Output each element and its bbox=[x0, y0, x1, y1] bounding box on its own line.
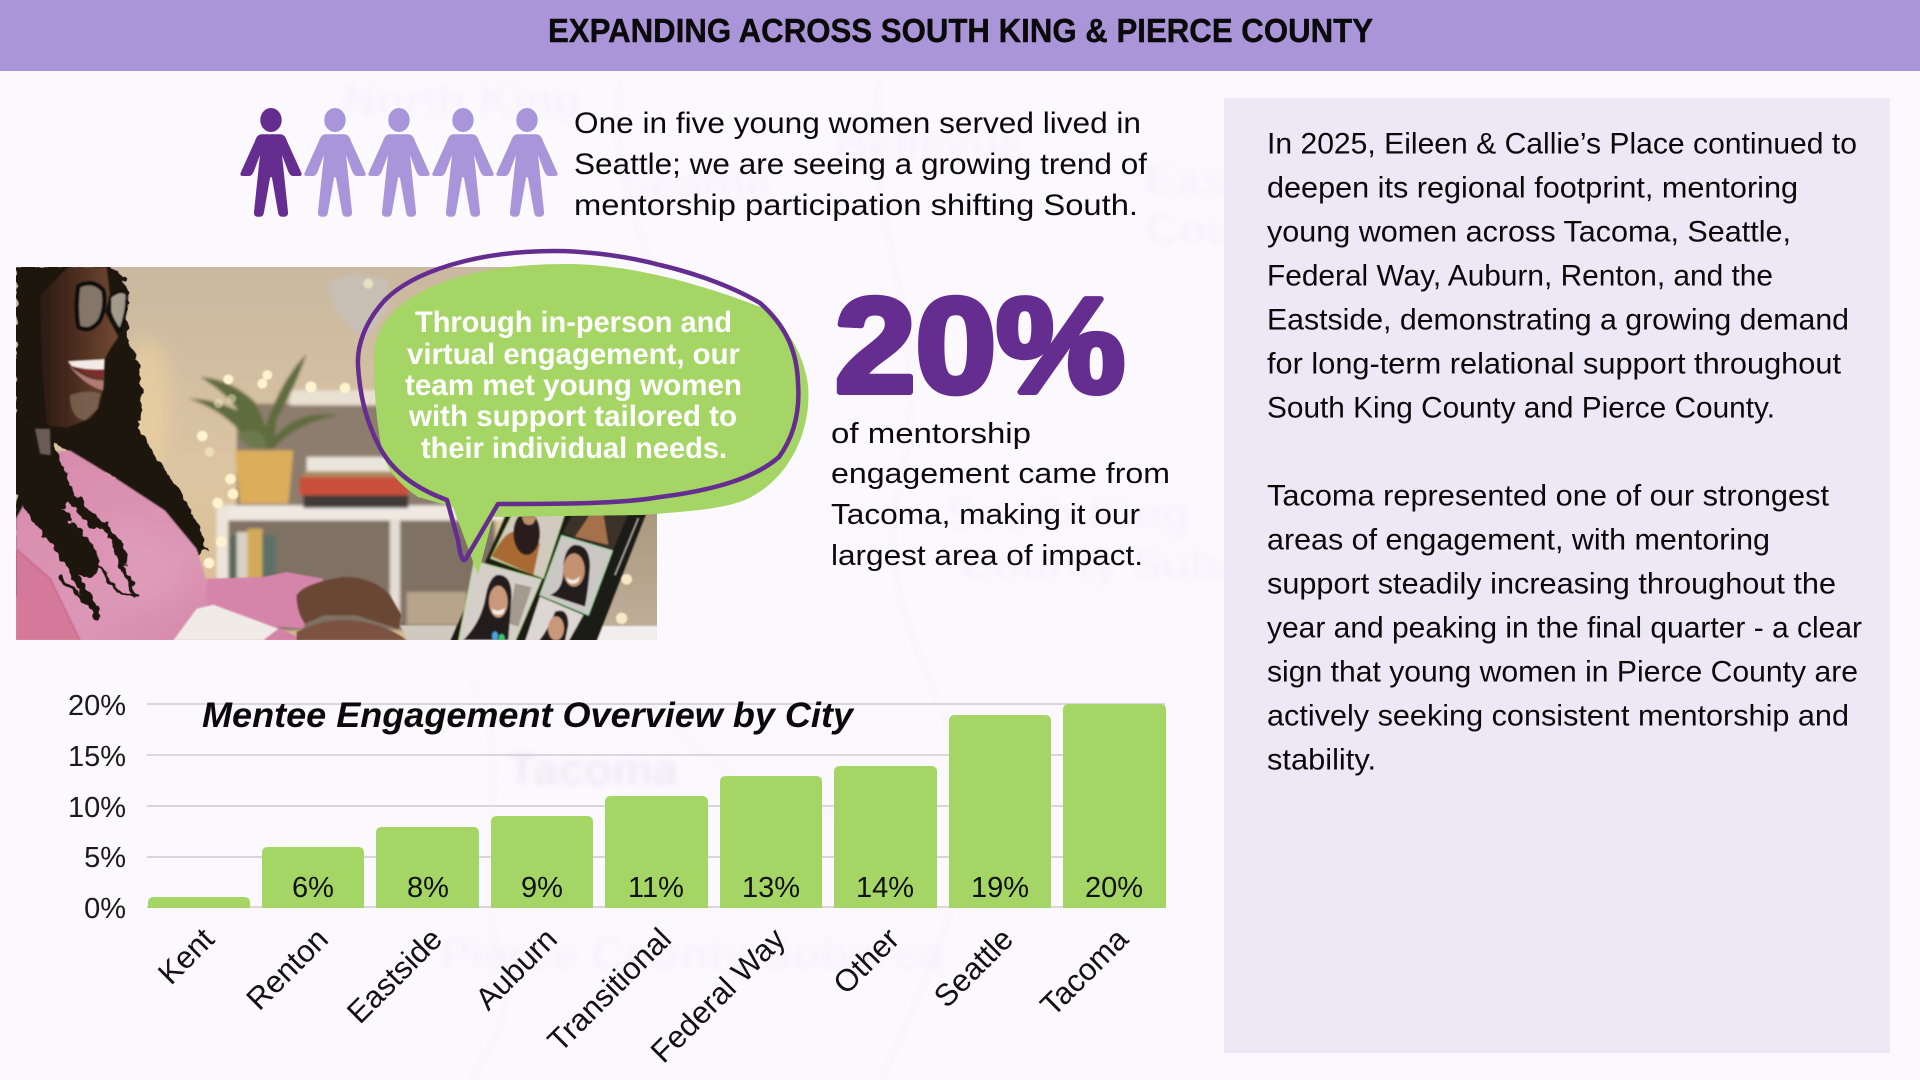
icon: highlighted person bbox=[240, 108, 302, 217]
category labels: Kent bbox=[151, 921, 221, 991]
icon: person 3 bbox=[368, 108, 430, 217]
background map watermark: Bellevue bbox=[835, 118, 1024, 170]
fairy lights bbox=[197, 279, 373, 568]
video tile 1 bbox=[491, 512, 565, 578]
y axis labels bbox=[68, 690, 126, 925]
screen app icons bbox=[492, 631, 505, 642]
chart title: Mentee Engagement Overview by City bbox=[202, 696, 855, 735]
y axis labels: 15% bbox=[68, 741, 126, 773]
video tile 5 bbox=[525, 597, 583, 642]
value labels: 19% bbox=[971, 872, 1029, 904]
right wall bbox=[602, 514, 657, 626]
white cuff bbox=[173, 605, 278, 640]
video tile 2 bbox=[563, 513, 628, 549]
video tile 4 bbox=[458, 561, 542, 642]
category labels: Auburn bbox=[469, 921, 564, 1017]
callout text bbox=[405, 306, 742, 465]
paragraph 2: sign that young women in Pierce County are bbox=[1267, 656, 1858, 688]
category labels: Transitional bbox=[541, 921, 678, 1058]
callout text: with support tailored to bbox=[408, 400, 737, 433]
background map watermark: North King bbox=[343, 74, 581, 126]
category labels: Tacoma bbox=[1033, 921, 1135, 1023]
callout text: team met young women bbox=[405, 369, 742, 402]
paragraph 1: South King County and Pierce County. bbox=[1267, 392, 1775, 424]
callout text: their individual needs. bbox=[421, 432, 727, 465]
purple outline bbox=[358, 251, 798, 560]
value labels: 8% bbox=[407, 872, 449, 904]
paragraph 2: stability. bbox=[1267, 744, 1376, 776]
text block: stat description: of mentorship bbox=[831, 418, 1031, 450]
icon: person 4 bbox=[432, 108, 494, 217]
bars bbox=[148, 704, 1166, 908]
text block: one in five: mentorship participation shifting South. bbox=[574, 189, 1138, 222]
wall lights bbox=[616, 574, 632, 624]
paragraph 2: year and peaking in the final quarter - a clear bbox=[1267, 612, 1862, 644]
icon row: one in five people bbox=[240, 108, 558, 217]
y axis labels: 5% bbox=[84, 842, 126, 874]
callout text: Through in-person and bbox=[415, 306, 732, 339]
hair bbox=[16, 267, 207, 595]
hands bbox=[297, 577, 402, 629]
photo wall and shelves bbox=[16, 267, 510, 640]
category labels: Eastside bbox=[340, 921, 449, 1030]
callout text: virtual engagement, our bbox=[407, 338, 740, 371]
value labels: 14% bbox=[856, 872, 914, 904]
background map watermark bbox=[343, 74, 1357, 1080]
text block: stat description: largest area of impact. bbox=[831, 540, 1143, 572]
glasses bbox=[77, 283, 127, 330]
text block: one in five: Seattle; we are seeing a growing trend of bbox=[574, 148, 1148, 181]
value labels: 6% bbox=[292, 872, 334, 904]
paragraph 1: Eastside, demonstrating a growing demand bbox=[1267, 304, 1849, 336]
neck bbox=[35, 429, 51, 455]
category labels: Renton bbox=[240, 921, 335, 1017]
category labels: Seattle bbox=[927, 921, 1020, 1014]
green bubble bbox=[374, 264, 808, 575]
background map watermark: County bbox=[1145, 203, 1304, 255]
text block: stat description: engagement came from bbox=[831, 458, 1170, 490]
icon: person 2 bbox=[304, 108, 366, 217]
photo corner mask bbox=[590, 262, 662, 282]
paragraph 1 bbox=[1267, 128, 1857, 424]
paragraph 1: In 2025, Eileen & Callie’s Place continued to bbox=[1267, 128, 1857, 160]
text block: one in five bbox=[574, 107, 1148, 222]
background map watermark: County Subarea bbox=[960, 538, 1313, 590]
background map watermark: Tacoma bbox=[508, 743, 679, 795]
smile bbox=[68, 359, 104, 379]
paragraph 2 bbox=[1267, 480, 1862, 776]
y axis labels: 20% bbox=[68, 690, 126, 722]
category labels: Federal Way bbox=[644, 921, 792, 1069]
panel: narrative bbox=[1224, 98, 1890, 1053]
value labels: 9% bbox=[521, 872, 563, 904]
icon: person 5 bbox=[496, 108, 558, 217]
sweater bbox=[16, 450, 323, 640]
paragraph 1: young women across Tacoma, Seattle, bbox=[1267, 216, 1791, 248]
value labels: 20% bbox=[1085, 872, 1143, 904]
paragraph 1: Federal Way, Auburn, Renton, and the bbox=[1267, 260, 1773, 292]
table bbox=[596, 625, 657, 640]
bar chart bbox=[68, 690, 1166, 1069]
laptop screen bbox=[450, 513, 647, 642]
paragraph 2: actively seeking consistent mentorship and bbox=[1267, 700, 1849, 732]
title: EXPANDING ACROSS SOUTH KING & PIERCE COUNTY bbox=[548, 13, 1373, 50]
value labels: 11% bbox=[628, 872, 684, 904]
y axis labels: 0% bbox=[84, 893, 126, 925]
paragraph 1: deepen its regional footprint, mentoring bbox=[1267, 172, 1798, 204]
face bbox=[40, 267, 118, 428]
big stat 20 percent: 20% bbox=[835, 270, 1125, 421]
category labels bbox=[151, 921, 1135, 1069]
video tile 3 bbox=[540, 536, 612, 615]
paragraph 2: Tacoma represented one of our strongest bbox=[1267, 480, 1829, 512]
text block: one in five: One in five young women served lived in bbox=[574, 107, 1141, 140]
value labels bbox=[292, 872, 1143, 904]
text block: stat description: Tacoma, making it our bbox=[831, 499, 1140, 531]
keyboard bbox=[400, 625, 457, 640]
photo: woman on a video call bbox=[16, 267, 657, 640]
paragraph 1: for long-term relational support throughout bbox=[1267, 348, 1841, 380]
header bar bbox=[0, 0, 1920, 71]
callout speech bubble bbox=[358, 251, 808, 575]
y axis labels: 10% bbox=[68, 792, 126, 824]
background map watermark: Seattle bbox=[620, 158, 771, 210]
value labels: 13% bbox=[742, 872, 800, 904]
background map watermark: Pierce County Subarea bbox=[440, 928, 944, 980]
paragraph 2: areas of engagement, with mentoring bbox=[1267, 524, 1770, 556]
paragraph 2: support steadily increasing throughout the bbox=[1267, 568, 1836, 600]
background map watermark: South King bbox=[945, 488, 1190, 540]
background map watermark: East King bbox=[1145, 153, 1357, 205]
category labels: Other bbox=[826, 921, 906, 1001]
text block: stat description bbox=[831, 418, 1170, 572]
hair curls over sweater bbox=[23, 435, 138, 615]
